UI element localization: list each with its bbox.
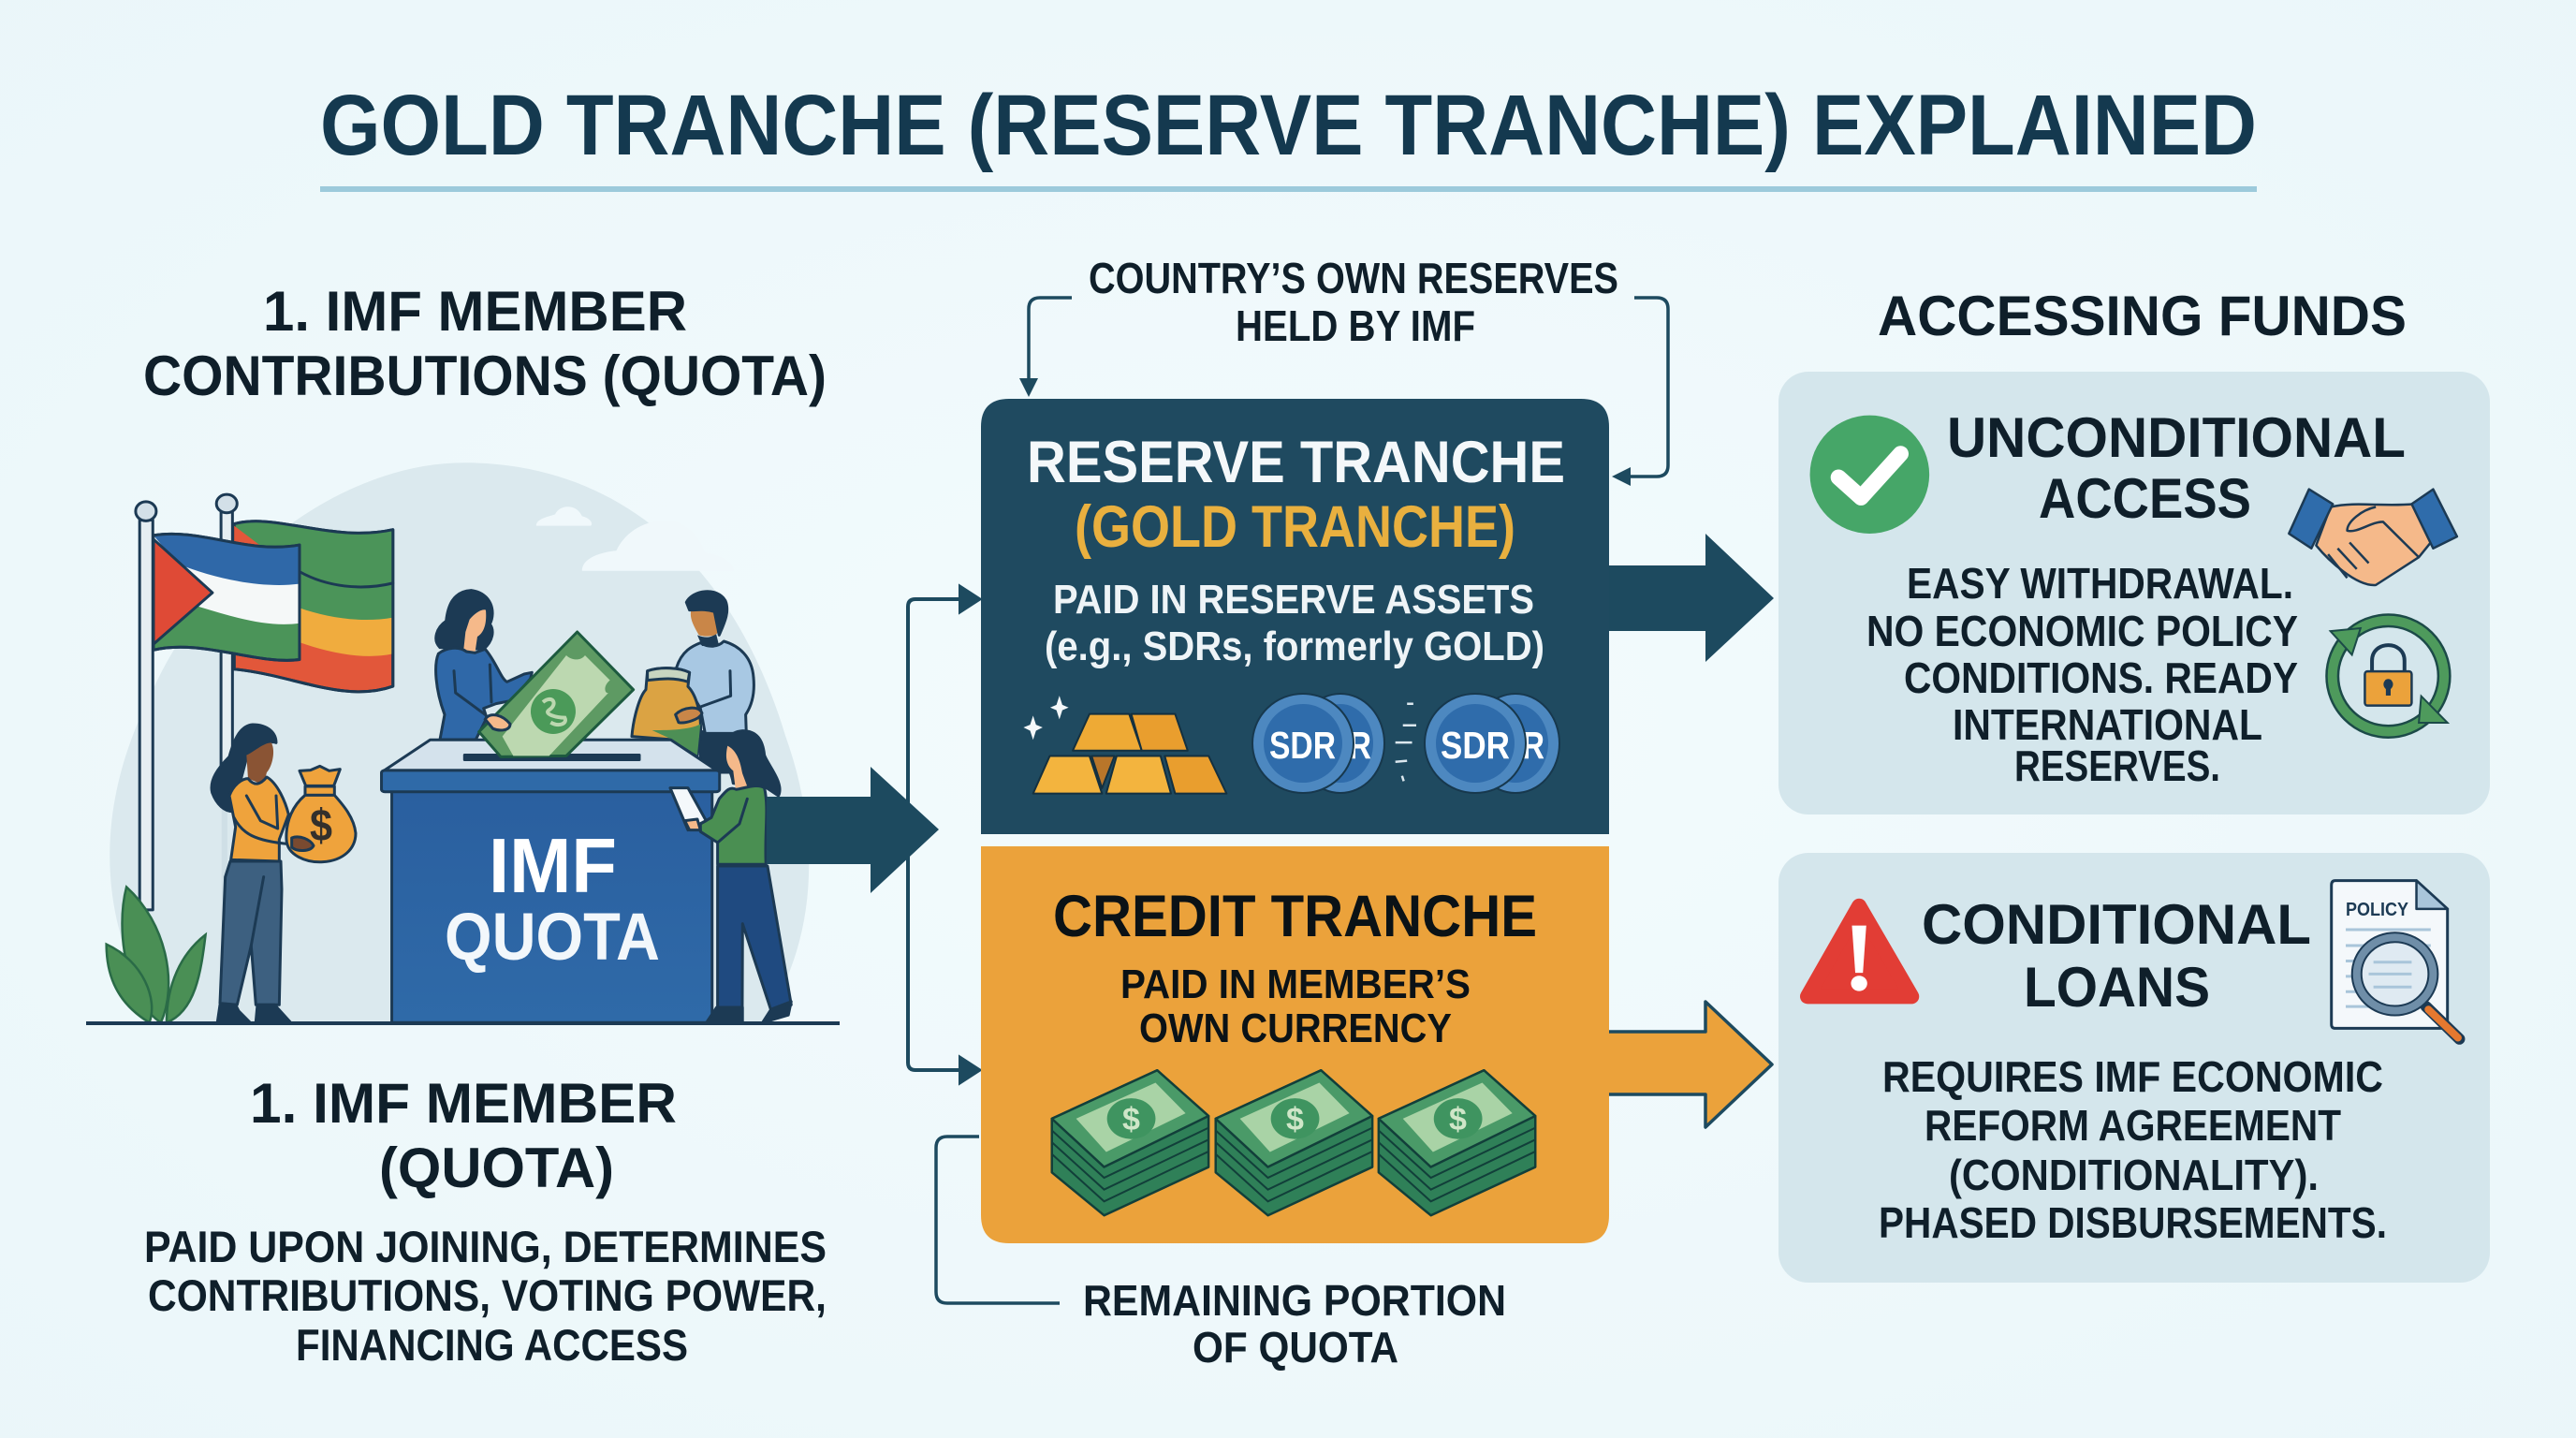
unconditional description: EASY WITHDRAWAL. [1907, 559, 2293, 608]
left lower heading: (QUOTA) [379, 1137, 614, 1199]
panel: conditional loans [1778, 853, 2490, 1283]
icon: SDR coins: R [1522, 724, 1544, 767]
icon: cash stacks: $ [1122, 1102, 1140, 1137]
money bag dollar sign: $ [310, 801, 332, 851]
box label: IMF QUOTA: QUOTA [445, 901, 660, 975]
ground line [86, 1021, 840, 1025]
reserve tranche heading [1027, 430, 1565, 560]
plant [107, 887, 206, 1022]
icon: SDR coins: SDR [1441, 724, 1510, 767]
people behind the box [436, 591, 754, 772]
callout: country's own reserves: HELD BY IMF [1236, 301, 1475, 350]
panel: unconditional access [1778, 372, 2490, 814]
backdrop, flags, plant [107, 462, 809, 1022]
person: woman in blue [436, 591, 532, 740]
woman with tablet shoes [707, 1002, 791, 1022]
unconditional description: INTERNATIONAL [1953, 700, 2262, 749]
bracket: remaining portion: REMAINING PORTION [1083, 1276, 1506, 1325]
left description text: CONTRIBUTIONS, VOTING POWER, [148, 1270, 827, 1320]
icon: cash stacks: $ [1449, 1102, 1467, 1137]
left lower heading [250, 1072, 677, 1199]
person: man with sack [632, 592, 754, 772]
left lower heading: 1. IMF MEMBER [250, 1072, 677, 1135]
unconditional description: CONDITIONS. READY [1904, 653, 2298, 702]
left description text [144, 1222, 827, 1370]
arrow: quota to tranches [767, 767, 939, 893]
unconditional heading: ACCESS [2039, 467, 2251, 530]
icon: handshake [2289, 490, 2457, 585]
reserve tranche heading: RESERVE TRANCHE [1027, 430, 1565, 495]
unconditional heading [1947, 406, 2406, 530]
person: woman with tablet [670, 731, 791, 1011]
bracket: remaining portion [936, 1137, 1506, 1372]
callout: country's own reserves [1019, 254, 1668, 486]
conditional description: (CONDITIONALITY). [1949, 1151, 2319, 1199]
credit tranche description [1120, 961, 1471, 1051]
reserve tranche description [1045, 577, 1544, 669]
title: GOLD TRANCHE (RESERVE TRANCHE) EXPLAINED [320, 78, 2257, 173]
conditional description: REFORM AGREEMENT [1925, 1101, 2341, 1150]
person: woman holding money bag [212, 725, 356, 1022]
icons: warning and policy document [1808, 881, 2459, 1039]
conditional heading: CONDITIONAL [1922, 893, 2311, 956]
left description text: FINANCING ACCESS [296, 1320, 688, 1370]
conditional description: PHASED DISBURSEMENTS. [1879, 1198, 2387, 1247]
unconditional description [1866, 559, 2298, 790]
front flag [154, 534, 300, 660]
left heading: member contributions [143, 280, 827, 407]
icon: SDR coins: R [1349, 724, 1371, 767]
connector: split to both tranches [908, 587, 979, 1082]
icons: check, handshake, lock [1810, 416, 2457, 731]
box label: IMF QUOTA [445, 822, 660, 975]
illustration: members paying into IMF quota box [86, 462, 840, 1025]
credit tranche description: PAID IN MEMBER’S [1120, 961, 1471, 1007]
icon: policy document with magnifier [2332, 881, 2459, 1039]
reserve tranche description: PAID IN RESERVE ASSETS [1053, 577, 1534, 623]
backdrop blob [110, 462, 809, 1022]
panel: reserve tranche [981, 399, 1609, 834]
credit tranche description: OWN CURRENCY [1139, 1005, 1452, 1051]
banknote entering slot [479, 632, 634, 756]
icon: warning triangle [1808, 906, 1911, 996]
panel: credit tranche [981, 846, 1609, 1243]
IMF quota box [382, 740, 720, 1022]
callout: country's own reserves: COUNTRY’S OWN RESERVES [1089, 254, 1618, 302]
bracket: remaining portion: OF QUOTA [1193, 1323, 1398, 1372]
clouds [536, 506, 734, 571]
left heading: member contributions: 1. IMF MEMBER [263, 280, 687, 343]
icon: cash stacks [1052, 1070, 1535, 1215]
icon: SDR coins: SDR [1269, 724, 1336, 767]
conditional description: REQUIRES IMF ECONOMIC [1882, 1052, 2383, 1101]
left heading: member contributions: CONTRIBUTIONS (QUOTA) [143, 345, 827, 407]
icon: lock with circular arrows [2331, 621, 2448, 731]
icon: check [1810, 416, 1929, 534]
credit tranche heading: CREDIT TRANCHE [1053, 884, 1537, 949]
unconditional description: RESERVES. [2014, 741, 2220, 790]
reserve tranche description: (e.g., SDRs, formerly GOLD) [1045, 624, 1544, 669]
box label: IMF QUOTA: IMF [489, 822, 617, 909]
back flag [234, 521, 393, 692]
conditional description [1879, 1052, 2387, 1247]
conditional heading [1922, 893, 2311, 1019]
left description text: PAID UPON JOINING, DETERMINES [144, 1222, 827, 1271]
reserve tranche heading: (GOLD TRANCHE) [1075, 494, 1515, 560]
flag poles [136, 494, 237, 969]
conditional heading: LOANS [2024, 956, 2210, 1019]
icon: SDR coins [1252, 694, 1559, 793]
unconditional description: NO ECONOMIC POLICY [1866, 607, 2298, 655]
arrow: credit to conditional [1609, 1002, 1772, 1127]
icon: cash stacks: $ [1286, 1102, 1304, 1137]
heading: accessing funds: ACCESSING FUNDS [1878, 285, 2407, 347]
sparkle dashes [1396, 704, 1416, 781]
arrow: reserve to unconditional [1609, 534, 1774, 662]
policy label: POLICY [2346, 900, 2409, 920]
unconditional heading: UNCONDITIONAL [1947, 406, 2406, 469]
icon: gold bars [1023, 696, 1416, 794]
